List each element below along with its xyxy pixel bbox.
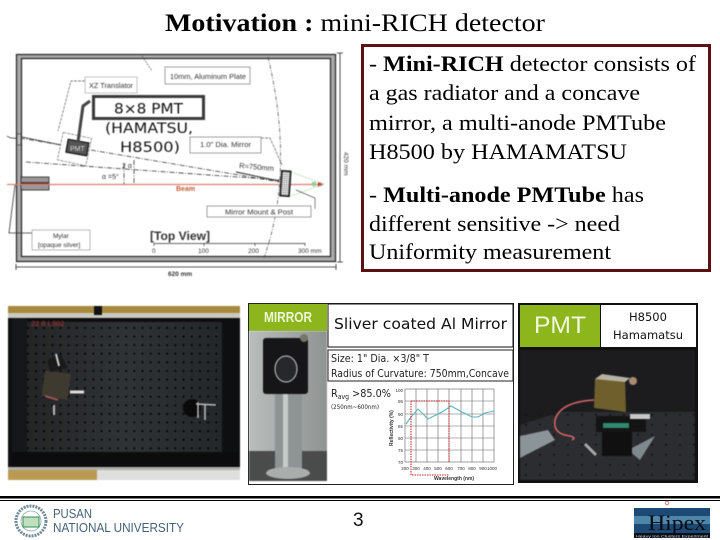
PMT heading <box>520 305 600 347</box>
reflectivity note: R <box>331 387 339 400</box>
PMT model text: (HAMATSU, <box>105 121 193 137</box>
mylar label: Mylar <box>53 233 70 240</box>
mirror name box: Sliver coated Al Mirror <box>334 315 508 333</box>
reflectivity chart: 75 <box>398 448 403 453</box>
text block: multi-anode PMTube note <box>369 182 644 264</box>
university name: PUSAN <box>53 507 92 521</box>
mirror size and curvature <box>328 350 513 381</box>
title: Motivation : mini-RICH detector <box>165 8 546 37</box>
reflectivity chart: 90 <box>398 412 403 417</box>
PMT and translator: PMT <box>70 146 86 153</box>
PMT model box: H8500 <box>629 310 667 324</box>
panel: description text box <box>362 46 710 270</box>
logo: HIPEX: Hipex <box>648 510 706 535</box>
mirror size and curvature: Size: 1" Dia. ×3/8" T <box>331 353 430 365</box>
mirror name box <box>328 304 513 347</box>
mirror mount label: Mirror Mount & Post <box>225 210 293 216</box>
university name <box>53 507 185 535</box>
angle labels: 2 α <box>122 163 132 170</box>
panel: PMT specification <box>518 304 698 482</box>
width dimension <box>16 264 336 278</box>
beam line <box>7 182 324 193</box>
reflectivity chart: 300 <box>412 466 420 471</box>
top view label and scale: 100 <box>198 248 209 255</box>
mirror sphere arc <box>264 57 281 258</box>
mirror heading <box>249 304 327 331</box>
reflectivity chart: 800 <box>468 466 476 471</box>
angle labels: α =5° <box>102 173 119 181</box>
top view label and scale: [Top View] <box>150 231 210 243</box>
mirror mount <box>280 171 324 196</box>
PMT assembly <box>42 353 84 415</box>
top view label and scale: 300 mm <box>298 248 321 255</box>
reflectivity chart <box>389 388 498 482</box>
PMT model box: Hamamatsu <box>613 328 683 342</box>
reflectivity note <box>331 387 391 411</box>
callout: 8x8 PMT <box>94 96 204 118</box>
reflectivity chart: 100 <box>395 388 403 393</box>
mirror label: 1.0" Dia. Mirror <box>200 140 252 149</box>
reflectivity note: avg <box>338 393 349 401</box>
footer divider lines <box>0 496 720 501</box>
aluminum plate frame <box>16 54 336 262</box>
text block: mini-RICH description: H8500 by HAMAMATSU <box>369 139 627 164</box>
reflectivity chart: 1000 <box>487 466 498 471</box>
PMT model text: H8500) <box>120 140 180 156</box>
radius label <box>236 161 279 181</box>
top view label and scale <box>150 231 321 255</box>
mirror assembly <box>183 399 216 420</box>
PMT model text <box>105 121 193 156</box>
reflectivity chart: 400 <box>423 466 431 471</box>
text block: mini-RICH description: a gas radiator and a concave <box>369 80 640 105</box>
PMT model box <box>601 305 696 347</box>
mirror size and curvature: Radius of Curvature: 750mm,Concave <box>331 368 509 380</box>
radius label: R=750mm <box>239 161 274 173</box>
reflectivity chart: 500 <box>434 466 442 471</box>
reflectivity chart: 200 <box>401 466 409 471</box>
panel: mirror specification <box>248 304 514 484</box>
mirror heading: MIRROR <box>264 309 312 326</box>
XZ translator label: XZ Translator <box>89 81 133 90</box>
text block: multi-anode PMTube note: - Multi-anode PMTube has <box>369 182 644 207</box>
aluminum plate label <box>142 56 250 84</box>
top view label and scale: 200 <box>248 248 259 255</box>
mylar label: [opaque silver] <box>38 242 80 249</box>
height dimension: 420 mm <box>342 152 349 175</box>
PMT setup photo <box>520 350 695 480</box>
reflectivity chart: Wavelength (nm) <box>434 476 474 482</box>
PMT and translator <box>7 132 92 166</box>
reflectivity chart: Reflectivity (%) <box>389 410 395 446</box>
university seal <box>16 506 46 536</box>
arrow to PMT <box>78 101 90 142</box>
mirror photo <box>249 331 327 481</box>
angle labels <box>102 163 132 181</box>
text block: multi-anode PMTube note: different sensitive -> need <box>369 211 620 236</box>
logo: Pusan National University <box>16 506 185 536</box>
university name: NATIONAL UNIVERSITY <box>53 521 185 535</box>
beam line: Beam <box>176 186 195 193</box>
logo: HIPEX: Heavy Ion Clusters Experiment <box>636 534 709 538</box>
mylar label <box>9 185 90 250</box>
reflectivity chart: 85 <box>398 424 403 429</box>
reflectivity chart: 70 <box>398 460 403 465</box>
height dimension <box>337 53 349 262</box>
timestamp: 22 8 L302 <box>31 319 64 328</box>
mirror label <box>190 137 282 165</box>
text block: multi-anode PMTube note: Uniformity measurement <box>369 239 612 264</box>
reflectivity chart: 600 <box>445 466 453 471</box>
callout: 8x8 PMT: 8×8 PMT <box>114 102 183 118</box>
PMT heading: PMT <box>534 312 586 339</box>
logo: HIPEX <box>634 501 710 538</box>
reflectivity note: >85.0% <box>349 387 391 400</box>
reflectivity chart: 80 <box>398 436 403 441</box>
optical axes <box>20 138 280 184</box>
mirror mount label <box>207 190 315 217</box>
text block: mini-RICH description: - Mini-RICH detector consists of <box>369 51 697 76</box>
page number: 3 <box>353 510 364 531</box>
text block: mini-RICH description <box>369 51 697 164</box>
reflectivity chart: 700 <box>457 466 465 471</box>
panel: top view detector diagram <box>7 53 349 278</box>
entrance port <box>21 177 49 190</box>
reflectivity chart: 95 <box>398 399 403 404</box>
aluminum plate label: 10mm, Aluminum Plate <box>170 72 246 81</box>
reflectivity chart: 900 <box>479 466 487 471</box>
width dimension: 620 mm <box>168 271 192 278</box>
XZ translator label <box>58 77 137 131</box>
top view label and scale: 0 <box>152 248 156 255</box>
reflectivity note: (250nm~600nm) <box>331 403 379 411</box>
text block: mini-RICH description: mirror, a multi-anode PMTube <box>369 110 666 135</box>
panel: detector box photo <box>8 306 240 480</box>
